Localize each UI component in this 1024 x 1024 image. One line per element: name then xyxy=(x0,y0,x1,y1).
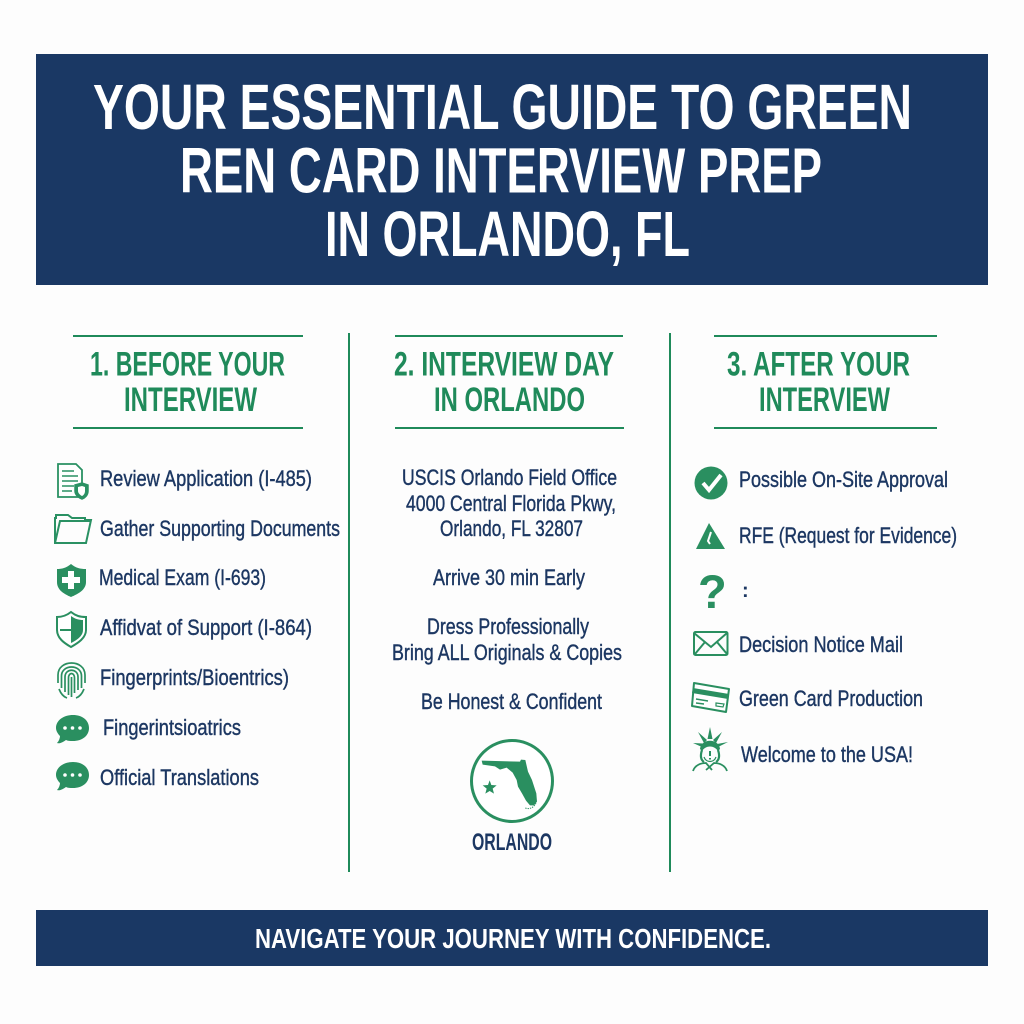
icon: check circle xyxy=(694,466,728,500)
icon: green card xyxy=(692,683,729,712)
item: colon: : xyxy=(742,580,749,602)
heading: interview day xyxy=(394,335,624,429)
text: dress and bring originals: Bring ALL Originals & Copies xyxy=(392,640,622,665)
heading: after your interview xyxy=(714,335,937,429)
icon: fingerprint xyxy=(58,663,85,698)
heading: before your interview: INTERVIEW xyxy=(124,381,258,419)
footer banner: NAVIGATE YOUR JOURNEY WITH CONFIDENCE. xyxy=(255,923,771,954)
icon: document with shield xyxy=(58,464,88,499)
text: be honest: Be Honest & Confident xyxy=(421,689,602,714)
item: decision notice: Decision Notice Mail xyxy=(739,632,903,657)
panel: after your interview xyxy=(692,335,957,771)
label: orlando: ORLANDO xyxy=(472,829,552,856)
title banner xyxy=(36,54,988,285)
icon: warning triangle xyxy=(696,523,725,549)
item: fingerprints: Fingerprints/Bioentrics) xyxy=(100,665,289,690)
icon: speech bubble xyxy=(56,762,89,790)
icon: folder xyxy=(55,515,91,543)
icon: question mark: ? xyxy=(698,565,727,618)
text: arrive early: Arrive 30 min Early xyxy=(433,565,585,590)
item: medical exam: Medical Exam (I-693) xyxy=(99,565,266,590)
text: dress and bring originals: Dress Professionally xyxy=(427,614,589,639)
text: office address: USCIS Orlando Field Office xyxy=(402,465,617,490)
item: welcome: Welcome to the USA! xyxy=(741,742,913,767)
text: dress and bring originals xyxy=(392,614,622,665)
item: gather documents: Gather Supporting Documents xyxy=(100,516,340,541)
item: affidavit of support: Affidvat of Support (I-864) xyxy=(100,615,312,640)
heading: after your interview: 3. AFTER YOUR xyxy=(727,346,910,384)
icon: envelope xyxy=(694,632,728,655)
heading: before your interview: 1. BEFORE YOUR xyxy=(90,346,285,384)
item: review application: Review Application (I-485) xyxy=(100,466,312,491)
heading: interview day: IN ORLANDO xyxy=(434,381,585,419)
item: rfe: RFE (Request for Evidence) xyxy=(739,523,957,548)
item: official translations: Official Translations xyxy=(100,765,259,790)
item: on-site approval: Possible On-Site Approval xyxy=(739,467,948,492)
title banner: IN ORLANDO, FL xyxy=(325,198,690,270)
icon: speech bubble xyxy=(56,715,89,743)
icon: medical shield xyxy=(57,564,86,597)
panel: interview day in orlando xyxy=(392,335,624,856)
text: office address xyxy=(402,465,617,541)
text: office address: 4000 Central Florida Pkwy, xyxy=(406,491,616,516)
text: office address: Orlando, FL 32807 xyxy=(440,516,583,541)
icon: affidavit shield xyxy=(57,612,86,647)
heading: interview day: 2. INTERVIEW DAY xyxy=(394,346,614,384)
item: fingerints: Fingerintsioatrics xyxy=(103,715,241,740)
panel: before your interview xyxy=(55,335,340,790)
item: green card production: Green Card Production xyxy=(739,686,923,711)
heading: after your interview: INTERVIEW xyxy=(759,381,891,419)
footer banner xyxy=(36,910,988,966)
heading: before your interview xyxy=(73,335,303,429)
icon: statue of liberty xyxy=(693,727,728,771)
icon: florida badge xyxy=(472,740,552,822)
